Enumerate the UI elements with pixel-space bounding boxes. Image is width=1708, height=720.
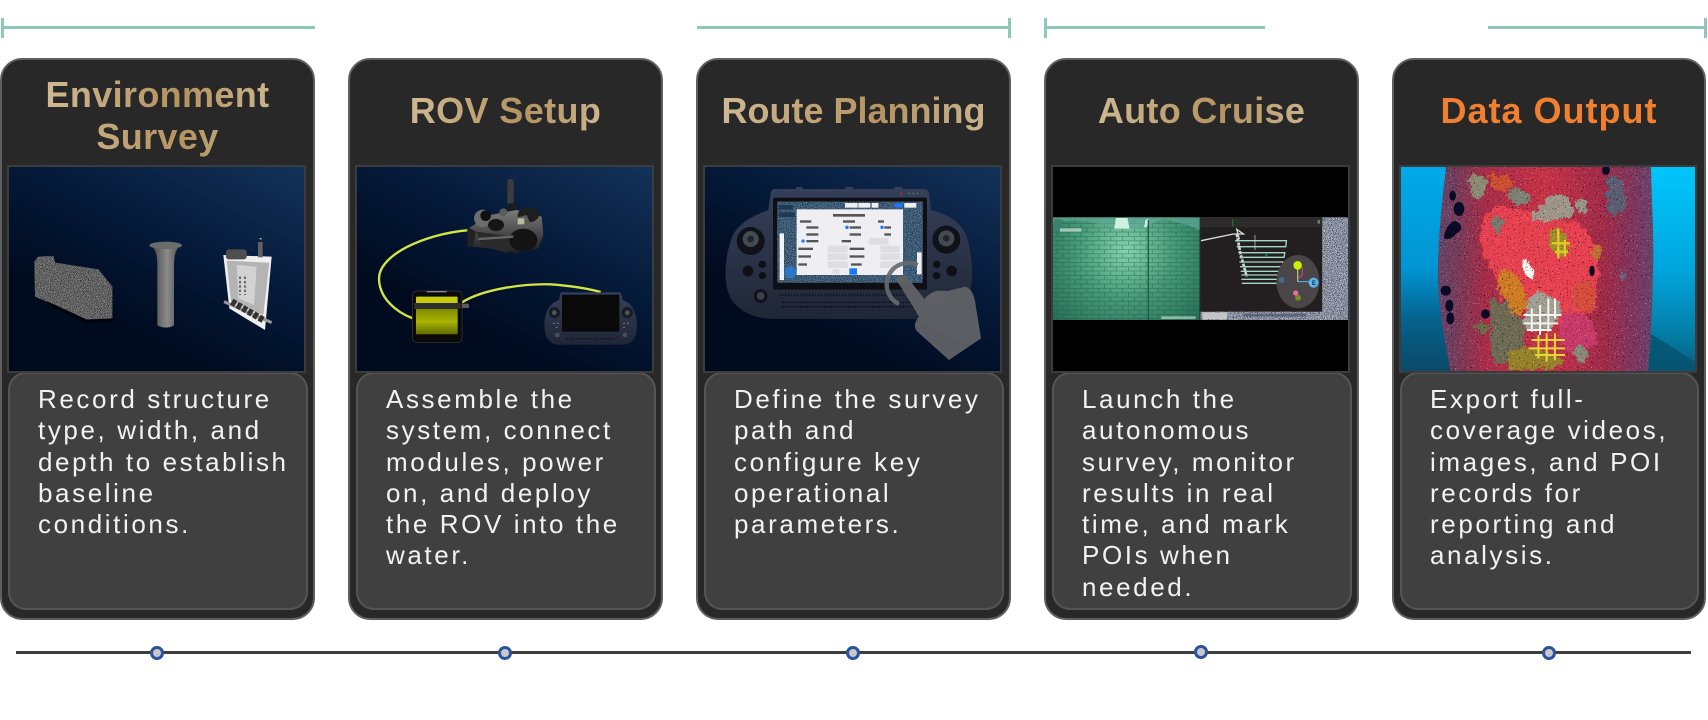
heading: Environment Survey: Survey bbox=[96, 116, 219, 156]
heading: Data Output: Data Output bbox=[1440, 90, 1657, 130]
description: Route Planning: Define the survey bbox=[734, 384, 981, 414]
description: Data Output: records for bbox=[1430, 478, 1583, 508]
timeline marker 1 bbox=[150, 646, 164, 660]
encrusted pillar bbox=[1429, 165, 1661, 372]
survey path window bbox=[1200, 217, 1348, 320]
description: ROV Setup: the ROV into the bbox=[386, 509, 620, 539]
panel: ROV Setup bbox=[348, 58, 663, 620]
description: Route Planning: parameters. bbox=[734, 509, 901, 539]
icon: rubble block bbox=[34, 256, 112, 319]
description: ROV Setup bbox=[356, 372, 656, 610]
tether cables bbox=[379, 230, 601, 318]
description: Route Planning: configure key bbox=[734, 447, 922, 477]
description: Data Output: images, and POI bbox=[1430, 447, 1663, 477]
icon: ROV bbox=[467, 179, 543, 253]
description: Data Output: analysis. bbox=[1430, 540, 1555, 570]
description: Route Planning: path and bbox=[734, 415, 856, 445]
survey path window: E bbox=[1312, 280, 1316, 287]
icon: dam section bbox=[223, 238, 272, 330]
description: Environment Survey: type, width, and bbox=[38, 415, 262, 445]
panel: Data Output bbox=[1392, 58, 1706, 620]
description: Route Planning: operational bbox=[734, 478, 891, 508]
description: ROV Setup: on, and deploy bbox=[386, 478, 593, 508]
timeline marker 3 bbox=[846, 646, 860, 660]
timeline marker 5 bbox=[1542, 646, 1556, 660]
icon: handheld controller bbox=[726, 187, 972, 319]
panel: Route Planning bbox=[696, 58, 1011, 620]
description: Auto Cruise: needed. bbox=[1082, 572, 1194, 602]
timeline marker 4 bbox=[1194, 645, 1208, 659]
timeline marker 2 bbox=[498, 646, 512, 660]
lattice patches bbox=[1524, 228, 1570, 362]
timeline bbox=[16, 645, 1691, 660]
description: Environment Survey bbox=[8, 372, 308, 610]
heading: Environment Survey: Environment bbox=[46, 74, 269, 114]
settings dialog bbox=[798, 214, 891, 266]
image: ROV system connected by tether bbox=[355, 165, 654, 373]
icon: controller bbox=[544, 292, 637, 345]
description: Data Output: Export full- bbox=[1430, 384, 1585, 414]
description: ROV Setup: modules, power bbox=[386, 447, 606, 477]
progress bar: step 5 bbox=[1488, 18, 1707, 38]
description: Auto Cruise: results in real bbox=[1082, 478, 1276, 508]
description: Data Output bbox=[1400, 372, 1699, 610]
progress bar: step 3 bbox=[697, 18, 1011, 38]
description: Data Output: reporting and bbox=[1430, 509, 1617, 539]
description: ROV Setup: system, connect bbox=[386, 415, 613, 445]
description: Auto Cruise bbox=[1052, 372, 1352, 610]
description: Auto Cruise: survey, monitor bbox=[1082, 447, 1297, 477]
description: ROV Setup: Assemble the bbox=[386, 384, 575, 414]
live underwater video feed bbox=[1053, 217, 1200, 320]
image: three underwater structure models bbox=[7, 165, 306, 373]
description: ROV Setup: water. bbox=[386, 540, 471, 570]
description: Environment Survey: baseline bbox=[38, 478, 156, 508]
description: Environment Survey: depth to establish bbox=[38, 447, 289, 477]
description: Environment Survey: conditions. bbox=[38, 509, 191, 539]
image: live video and survey path screen bbox=[1051, 165, 1350, 373]
progress bar: step 4 bbox=[1044, 18, 1265, 38]
description: Auto Cruise: autonomous bbox=[1082, 415, 1251, 445]
heading: Environment Survey bbox=[46, 74, 269, 158]
description: Data Output: coverage videos, bbox=[1430, 415, 1668, 445]
description: Environment Survey: Record structure bbox=[38, 384, 272, 414]
icon: pillar bbox=[149, 242, 182, 328]
panel: Auto Cruise bbox=[1044, 58, 1359, 620]
image: orthomosaic of encrusted pillar bbox=[1399, 165, 1697, 373]
description: Auto Cruise: POIs when bbox=[1082, 540, 1233, 570]
heading: Auto Cruise: Auto Cruise bbox=[1098, 90, 1305, 130]
icon: tether reel bbox=[412, 291, 469, 343]
description: Auto Cruise: time, and mark bbox=[1082, 509, 1290, 539]
dark holes bbox=[1440, 166, 1610, 324]
heading: Route Planning: Route Planning bbox=[722, 90, 986, 130]
description: Route Planning bbox=[704, 372, 1004, 610]
icon: touching hand bbox=[887, 263, 981, 360]
panel: Environment Survey bbox=[0, 58, 315, 620]
heading: ROV Setup: ROV Setup bbox=[410, 90, 601, 130]
image: controller with route settings and touching hand bbox=[703, 165, 1002, 373]
description: Auto Cruise: Launch the bbox=[1082, 384, 1237, 414]
survey path window: x bbox=[1317, 220, 1320, 226]
progress bar: step 1 bbox=[1, 18, 315, 38]
